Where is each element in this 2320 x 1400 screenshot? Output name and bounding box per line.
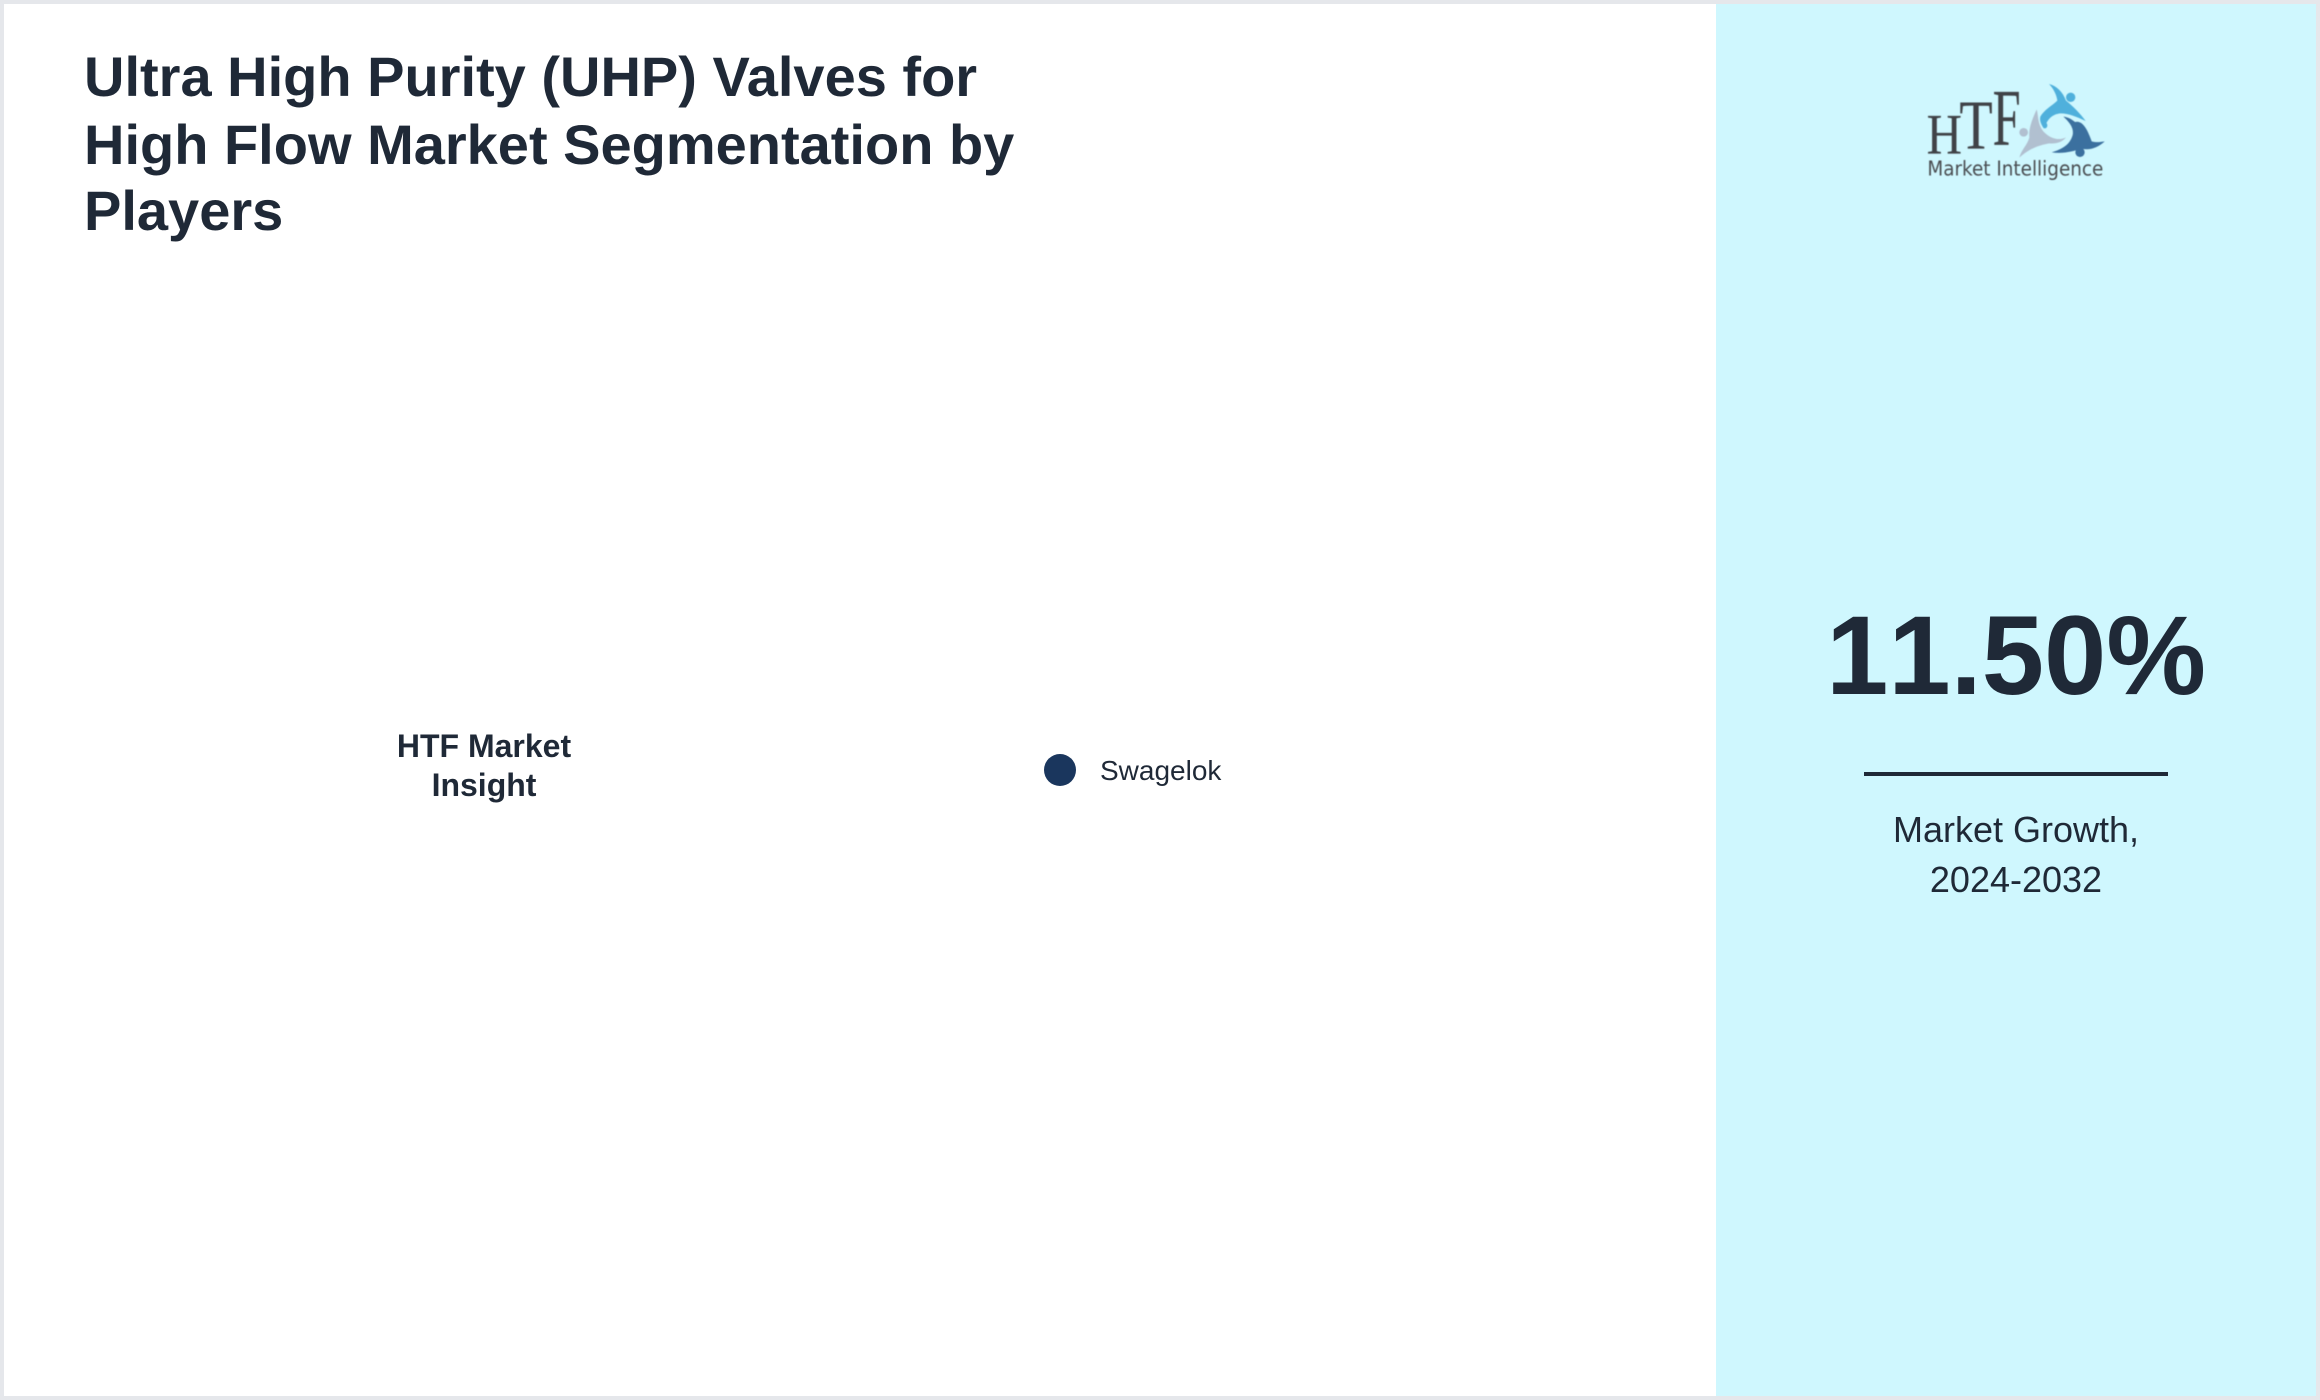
logo letters: [1927, 75, 2021, 166]
big number: growth rate: 11.50%: [1826, 593, 2206, 718]
chart center label: [397, 728, 571, 803]
caption: market growth period: Market Growth,: [1893, 809, 2139, 850]
logo wordmark: Market Intelligence: [1927, 156, 2103, 180]
legend label: Swagelok: Swagelok: [1100, 755, 1221, 786]
divider: [1864, 772, 2168, 776]
title: Ultra High Purity (UHP) Valves for: [84, 45, 977, 108]
logo figure: light blue: [2040, 84, 2086, 129]
legend marker: Swagelok: [1044, 754, 1076, 786]
caption: market growth period: [1893, 809, 2139, 900]
logo letters: F: [1993, 75, 2021, 163]
chart center label: HTF Market: [397, 728, 571, 764]
caption: market growth period: 2024-2032: [1930, 859, 2102, 900]
title: [84, 45, 1014, 242]
logo figure: grey: [2019, 109, 2066, 158]
chart center label: Insight: [432, 767, 536, 803]
title: High Flow Market Segmentation by: [84, 113, 1014, 176]
logo letters: T: [1959, 87, 1993, 164]
logo: HTF Market Intelligence: [1927, 75, 2105, 181]
title: Players: [84, 179, 283, 242]
panel: market growth sidebar: [1716, 4, 2316, 1396]
logo figure: dark blue: [2052, 117, 2105, 157]
logo letters: H: [1927, 103, 1962, 166]
